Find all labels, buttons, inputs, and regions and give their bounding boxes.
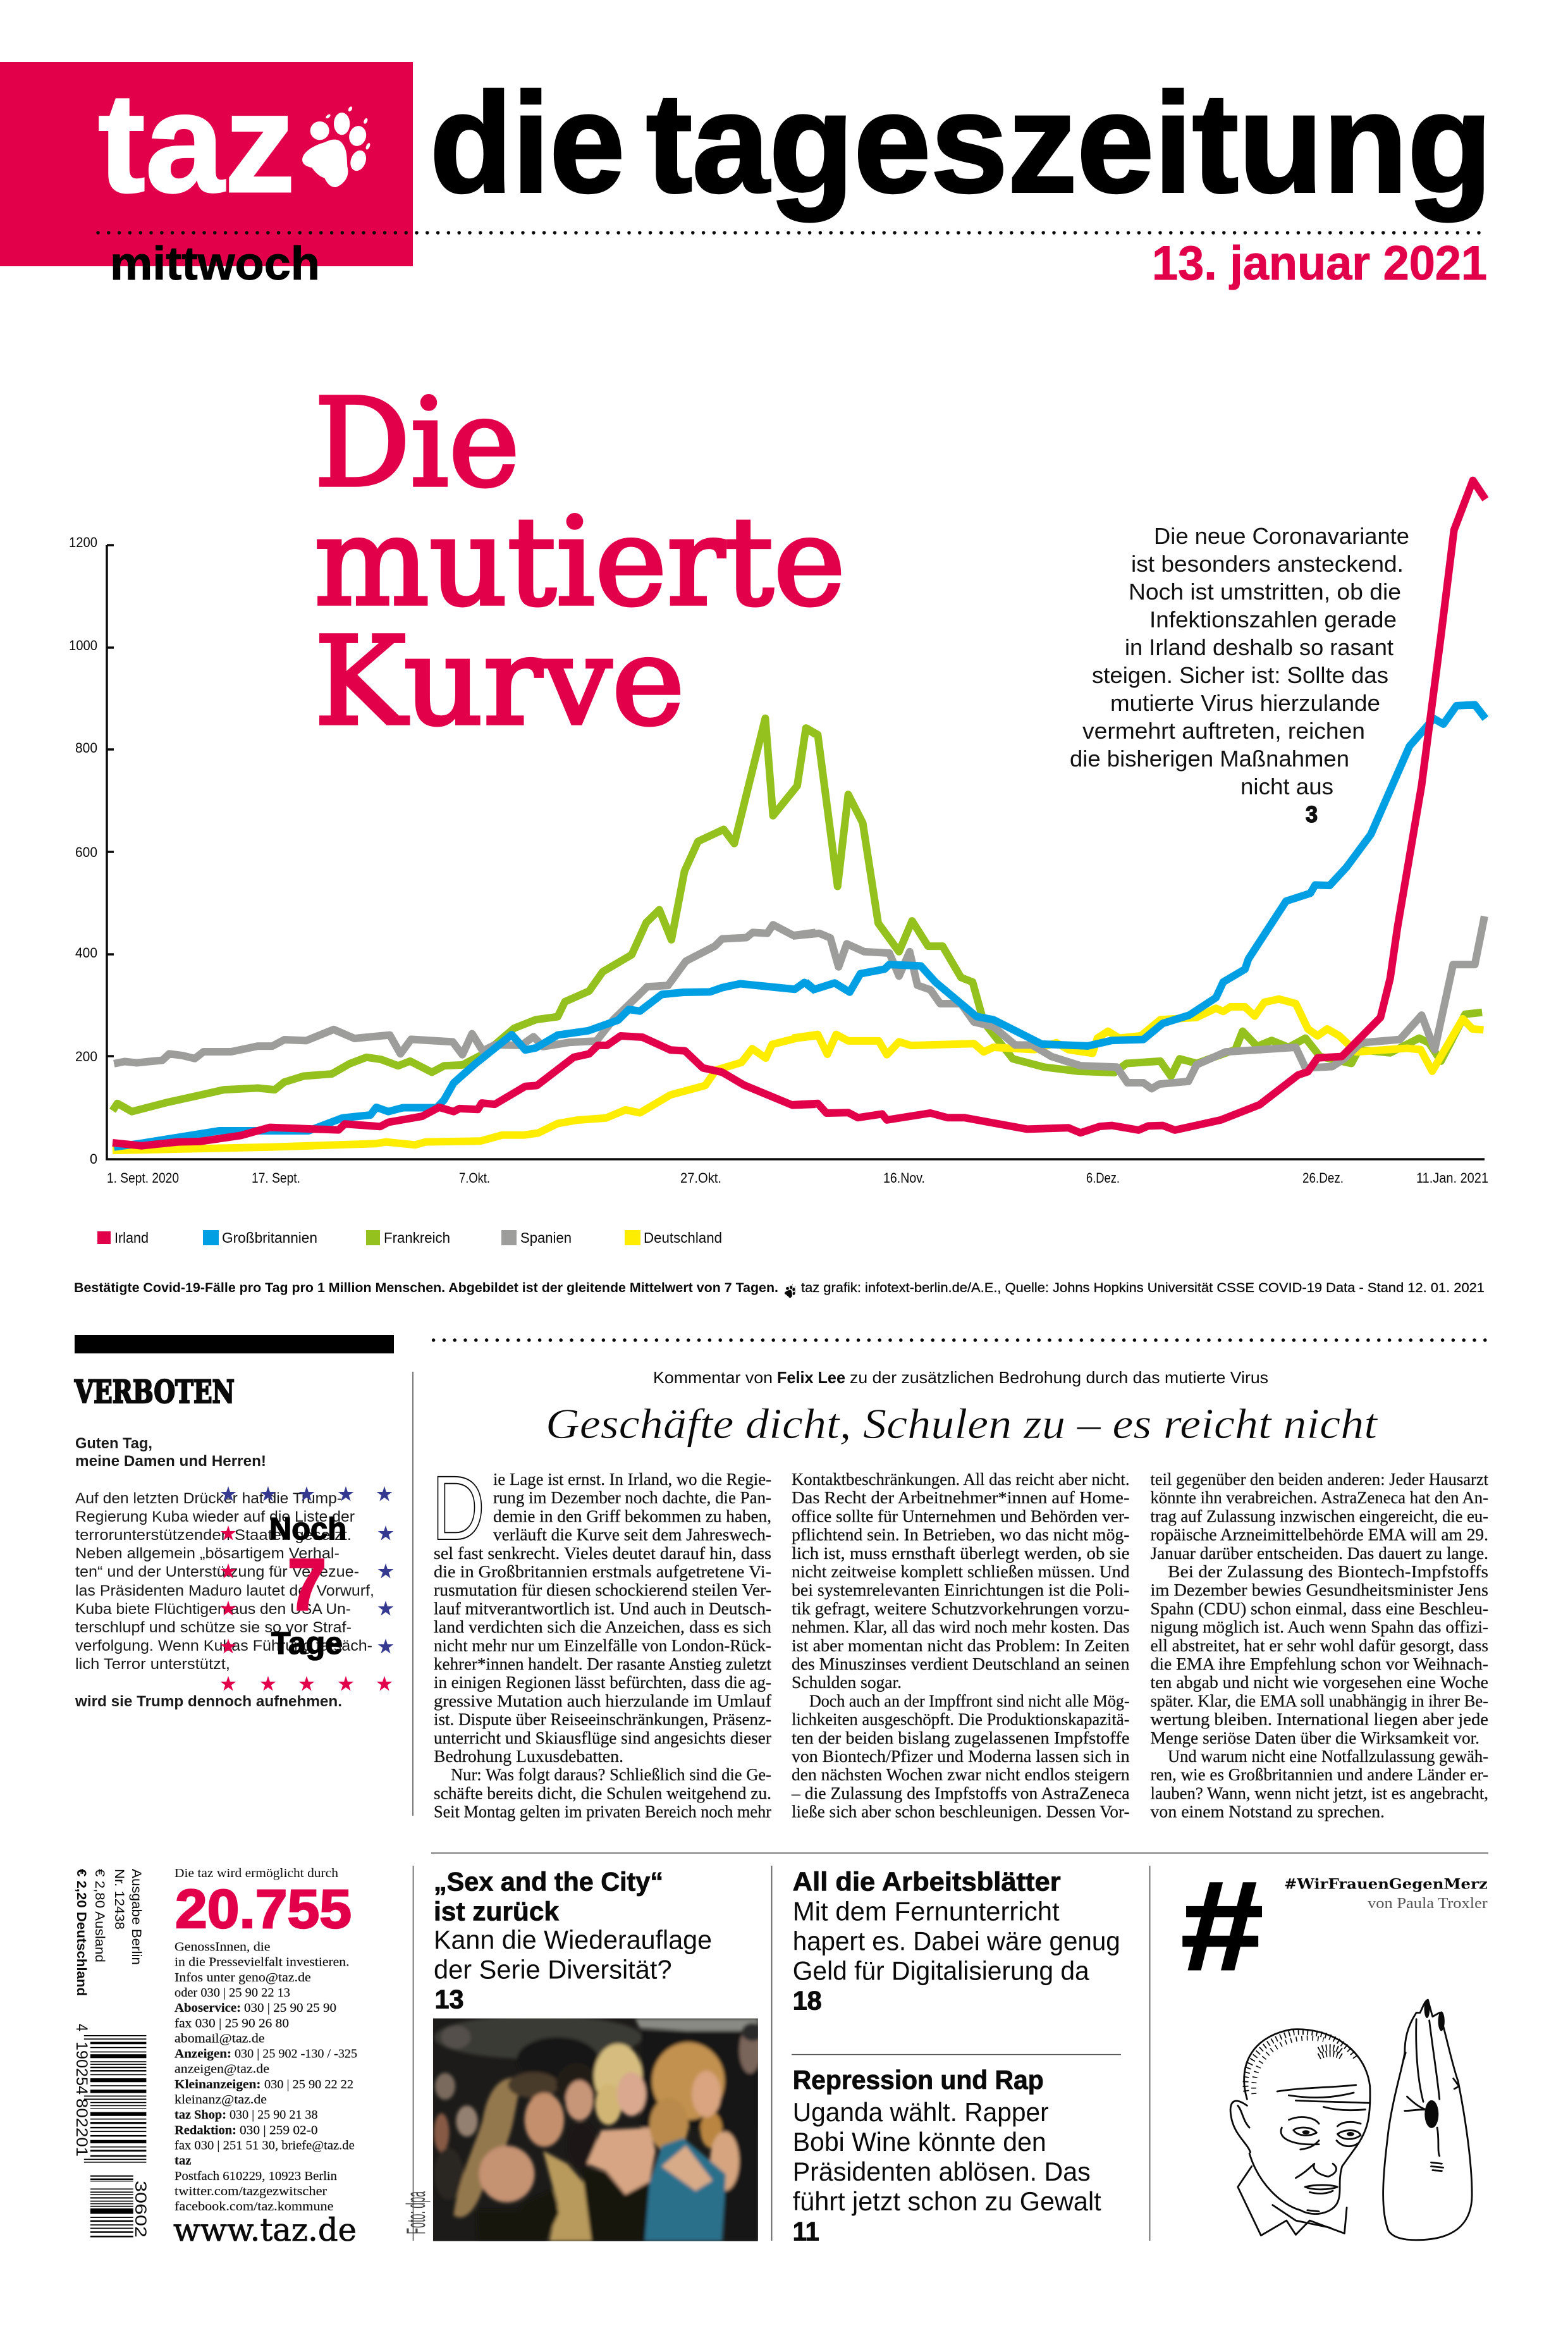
barcode: 30602 xyxy=(132,2181,149,2238)
article column 3: im Dezember bewies Gesundheitsminister Jens xyxy=(1151,1580,1488,1599)
x axis labels: 1. Sept. 2020 xyxy=(107,1170,179,1186)
callout text: Noch ist umstritten, ob die xyxy=(1129,579,1401,605)
article column 1: lauf mitverantwortlich ist. Und auch in Deutsch- xyxy=(434,1598,771,1618)
barcode: 4 xyxy=(73,2024,90,2031)
article column 3: ropäische Arzneimittelbehörde EMA will am 29. xyxy=(1151,1525,1488,1544)
logo block xyxy=(0,62,413,266)
headline: Kurve xyxy=(314,612,685,753)
article column 1: verläuft die Kurve seit dem Jahreswech- xyxy=(493,1525,771,1544)
contact lines: oder 030 | 25 90 22 13 xyxy=(175,1986,290,2000)
text block: terrorunterstützenden Staaten gesetzt. xyxy=(75,1527,352,1544)
text block: Neben allgemein „bösartigem Verhal- xyxy=(75,1545,340,1562)
article column 1: schäfte bereits dicht, die Schulen weitgehend zu. xyxy=(434,1783,771,1802)
edition info, rotated: Ausgabe Berlin xyxy=(129,1869,144,1965)
edition info, rotated xyxy=(74,1869,144,1996)
article column 1: sel fast senkrecht. Vieles deutet darauf hin, dass xyxy=(434,1543,771,1563)
teaser: Repression und Rap: führt jetzt schon zu Gewalt xyxy=(793,2186,1101,2216)
article column 3: Und warum nicht eine Notfallzulassung gewäh- xyxy=(1168,1746,1488,1766)
contact lines: abomail@taz.de xyxy=(175,2031,265,2045)
contact lines: 030 | 25 90 21 38 xyxy=(230,2108,317,2122)
contact lines: 030 | 25 90 25 90 xyxy=(244,2001,336,2015)
legend: Großbritannien xyxy=(222,1229,317,1246)
cartoon title: #WirFrauenGegenMerz xyxy=(1284,1876,1488,1892)
intro line: Die taz wird ermöglicht durch xyxy=(175,1867,338,1880)
y axis: 600 xyxy=(75,844,97,860)
article column 2: lich ist, muss ernsthaft überlegt werden, ob sie xyxy=(792,1543,1129,1563)
article column 2: Doch auch an der Impffront sind nicht alle Mög- xyxy=(809,1690,1129,1710)
callout text: in Irland deshalb so rasant xyxy=(1125,634,1393,660)
website: www.taz.de xyxy=(173,2212,357,2248)
contact lines: 030 | 25 902 -130 / -325 xyxy=(235,2047,357,2061)
countdown: noch 7 tage: Tage xyxy=(271,1627,343,1661)
newspaper title: die xyxy=(430,64,625,222)
article column 1: nicht mehr nur um Einzelfälle von London-Rück- xyxy=(434,1635,771,1655)
greeting: Guten Tag, xyxy=(75,1435,152,1452)
article column 1 xyxy=(434,1469,772,1821)
byline: Kommentar von xyxy=(653,1368,773,1387)
article column 2: des Minuszinses verdient Deutschland an seinen xyxy=(792,1654,1130,1673)
barcode xyxy=(73,2024,149,2238)
teaser: Repression und Rap xyxy=(793,2065,1101,2246)
byline: Felix Lee xyxy=(777,1368,845,1387)
edition info, rotated: € 2,20 Deutschland xyxy=(74,1869,89,1996)
article column 1: ie Lage ist ernst. In Irland, wo die Regie- xyxy=(493,1469,771,1489)
x axis labels: 7.Okt. xyxy=(459,1170,490,1186)
contact lines: GenossInnen, die xyxy=(175,1940,271,1954)
callout text: ist besonders ansteckend. xyxy=(1131,551,1404,577)
y axis: 1200 xyxy=(69,534,97,550)
edition info, rotated: € 2,80 Ausland xyxy=(92,1869,107,1962)
text block: Regierung Kuba wieder auf die Liste der xyxy=(75,1508,355,1525)
article column 2: Das Recht der Arbeitnehmer*innen auf Home- xyxy=(792,1487,1129,1507)
chart caption and source: Bestätigte Covid-19-Fälle pro Tag pro 1 Million Menschen. Abgebildet ist der gleitende Mittelwert von 7 Tagen. xyxy=(74,1281,778,1295)
article column 2: bei systemrelevanten Einrichtungen ist die Poli- xyxy=(792,1580,1129,1599)
article column 1: unterricht und Skiausflüge sind angesichts dieser xyxy=(434,1728,771,1747)
y axis: 400 xyxy=(75,945,97,961)
article column 3 xyxy=(1151,1469,1488,1821)
y axis: 800 xyxy=(75,740,97,756)
callout text: die bisherigen Maßnahmen xyxy=(1070,746,1349,772)
newspaper title: tageszeitung xyxy=(646,64,1492,222)
teaser: Arbeitsblätter: All die Arbeitsblätter xyxy=(793,1866,1061,1896)
article column 2: den nächsten Wochen zwar nicht endlos steigern xyxy=(792,1764,1130,1784)
line: Spanien xyxy=(114,916,1485,1088)
text block: lich Terror unterstützt, xyxy=(75,1656,230,1673)
greeting xyxy=(75,1435,266,1470)
teaser: Sex and the City: Kann die Wiederauflage xyxy=(434,1925,712,1955)
contact lines: fax 030 | 251 51 30, briefe@taz.de xyxy=(175,2139,355,2153)
line: Irland xyxy=(113,481,1485,1146)
weekday: mittwoch xyxy=(110,237,320,290)
icon: paw xyxy=(302,106,371,187)
article column 1: gressive Mutation auch hierzulande im Umlauf xyxy=(434,1690,772,1710)
barcode: 802201 xyxy=(73,2098,90,2157)
x axis labels: 26.Dez. xyxy=(1302,1170,1344,1186)
contact lines: 030 | 259 02-0 xyxy=(240,2123,317,2137)
text block: ten“ und der Unterstützung für Venezue- xyxy=(75,1563,359,1580)
callout text: Infektionszahlen gerade xyxy=(1149,607,1397,632)
article column 1: in einigen Regionen lässt befürchten, dass die ag- xyxy=(434,1672,771,1692)
legend: Spanien xyxy=(520,1229,572,1246)
x axis labels: 17. Sept. xyxy=(252,1170,300,1186)
callout text: Die neue Coronavariante xyxy=(1154,523,1409,549)
teaser: Sex and the City: 13 xyxy=(435,1985,464,2014)
byline xyxy=(653,1368,1268,1387)
teaser: Repression und Rap: Repression und Rap xyxy=(793,2065,1044,2095)
article column 2: office sollte für Unternehmen und Behörden ver- xyxy=(792,1506,1129,1525)
article column 2: – die Zulassung des Impfstoffs von AstraZeneca xyxy=(791,1783,1129,1802)
contact lines: 030 | 25 90 22 22 xyxy=(264,2078,353,2091)
article column 1: rusmutation für diesen schockierend steilen Ver- xyxy=(434,1580,771,1599)
article column 3: könnte ihn verabreichen. AstraZeneca hat den An- xyxy=(1151,1487,1488,1507)
edition info, rotated: Nr. 12438 xyxy=(112,1869,126,1930)
article column 1: Nur: Was folgt daraus? Schließlich sind die Ge- xyxy=(451,1764,771,1784)
contact lines: fax 030 | 25 90 26 80 xyxy=(175,2016,289,2030)
countdown: noch 7 tage: Noch xyxy=(269,1512,346,1546)
contact lines: Redaktion: xyxy=(175,2123,236,2137)
teaser: Sex and the City: Foto: dpa xyxy=(401,2191,431,2234)
article column 3: ten abgab und nicht wie vorgesehen eine Woche xyxy=(1151,1672,1488,1692)
contact lines: Anzeigen: xyxy=(175,2047,231,2061)
article column 1: die in Großbritannien erstmals aufgetretene Vi- xyxy=(434,1561,771,1581)
article column 2 xyxy=(791,1469,1130,1821)
article column 2: lichkeiten ausgeschöpft. Die Produktionskapazitä- xyxy=(792,1709,1129,1729)
text block xyxy=(75,1490,374,1710)
legend: Irland xyxy=(114,1229,149,1246)
x axis labels xyxy=(107,1170,1488,1186)
article column 1: ist. Dispute über Reiseeinschränkungen, Präsenz- xyxy=(434,1709,771,1729)
y axis: 200 xyxy=(75,1049,97,1064)
illustration: head and hand xyxy=(1230,2000,1472,2240)
contact lines: facebook.com/taz.kommune xyxy=(175,2200,334,2214)
callout text: steigen. Sicher ist: Sollte das xyxy=(1092,662,1388,688)
teaser: Repression und Rap: Bobi Wine könnte den xyxy=(793,2127,1046,2157)
callout text: mutierte Virus hierzulande xyxy=(1110,690,1380,716)
contact lines: in die Pressevielfalt investieren. xyxy=(175,1955,349,1969)
article column 2: nicht zeitweise komplett schließen müssen. Und xyxy=(792,1561,1130,1581)
teaser: Arbeitsblätter xyxy=(793,1866,1120,2015)
article column 3: die EMA ihre Empfehlung schon vor Weihnach- xyxy=(1151,1654,1488,1673)
x axis labels: 6.Dez. xyxy=(1086,1170,1120,1186)
article column 2: ließe sich aber schon beschleunigen. Dessen Vor- xyxy=(792,1802,1129,1821)
y axis xyxy=(69,534,1485,1167)
heading: Verboten: VERBOTEN xyxy=(74,1373,235,1410)
panel: Verboten column xyxy=(74,1335,394,1710)
article column 2: von Biontech/Pfizer und Moderna lassen sich in xyxy=(792,1746,1130,1766)
icon: hash sign: # xyxy=(1181,1856,1263,1997)
headline xyxy=(314,373,845,753)
panel: hashtag cartoon xyxy=(1181,1856,1488,2240)
contact lines: Postfach 610229, 10923 Berlin xyxy=(175,2169,337,2183)
byline: zu der zusätzlichen Bedrohung durch das mutierte Virus xyxy=(850,1368,1268,1387)
article heading: Geschäfte dicht, Schulen zu – es reicht nicht xyxy=(546,1400,1378,1448)
chart: covid cases xyxy=(69,481,1488,1298)
article column 1: rung im Dezember noch dachte, die Pan- xyxy=(493,1487,771,1507)
masthead xyxy=(0,62,1492,290)
article column 1: kehrer*innen handelt. Der rasante Anstieg zuletzt xyxy=(434,1654,771,1673)
article column 3: Januar darüber entscheiden. Das dauert zu lange. xyxy=(1151,1543,1488,1563)
callout text: nicht aus xyxy=(1240,773,1333,799)
text block: verfolgung. Wenn Kubas Führung tatsäch- xyxy=(75,1637,372,1654)
article column 2: ten der beiden bislang zugelassenen Impfstoffe xyxy=(792,1728,1129,1747)
legend: Frankreich xyxy=(384,1229,450,1246)
article column 3: lauben? Wann, wenn nicht jetzt, ist es angebracht, xyxy=(1151,1783,1488,1802)
y axis: 1000 xyxy=(69,637,97,653)
headline: Die xyxy=(314,373,520,514)
photo: four actresses xyxy=(433,2016,763,2241)
article column 1: demie in den Griff bekommen zu haben, xyxy=(493,1506,771,1525)
contact lines: Infos unter geno@taz.de xyxy=(175,1971,311,1985)
teaser: Sex and the City xyxy=(401,1866,763,2241)
article column 3: teil gegenüber den beiden anderen: Jeder Hausarzt xyxy=(1151,1469,1488,1489)
article column 3: Bei der Zulassung des Biontech-Impfstoffs xyxy=(1168,1561,1488,1581)
article column 3: trag auf Zulassung inzwischen eingereicht, die eu- xyxy=(1151,1506,1488,1525)
x axis labels: 27.Okt. xyxy=(680,1170,721,1186)
contact lines: taz Shop: xyxy=(175,2108,226,2122)
contact lines: twitter.com/tazgezwitscher xyxy=(175,2184,327,2198)
logo block: taz xyxy=(98,64,295,222)
article column 3: Spahn (CDU) schon einmal, dass eine Beschleu- xyxy=(1151,1598,1488,1618)
text block: Kuba biete Flüchtigen aus den USA Un- xyxy=(75,1601,351,1618)
contact lines: anzeigen@taz.de xyxy=(175,2062,269,2076)
barcode: 190254 xyxy=(73,2041,90,2095)
article column 2: Kontaktbeschränkungen. All das reicht aber nicht. xyxy=(792,1469,1129,1489)
y axis: 0 xyxy=(90,1151,97,1167)
contact lines: Aboservice: xyxy=(175,2001,241,2015)
text block: las Präsidenten Maduro lautet der Vorwurf, xyxy=(75,1582,374,1599)
text block: wird sie Trump dennoch aufnehmen. xyxy=(75,1693,342,1710)
article column 3: ren, wie es Großbritannien und andere Länder er- xyxy=(1151,1764,1488,1784)
teaser: Sex and the City: der Serie Diversität? xyxy=(434,1955,672,1985)
icon: stars frame xyxy=(221,1486,393,1691)
teaser: Arbeitsblätter: Geld für Digitalisierung da xyxy=(793,1956,1089,1986)
article column 2: Schulden sogar. xyxy=(792,1672,902,1692)
article column 2: nehmen. Klar, all das wird noch mehr kosten. Das xyxy=(792,1617,1129,1637)
line: Frankreich xyxy=(113,718,1482,1112)
article column 2: pflichtend sein. In Betrieben, wo das nicht mög- xyxy=(792,1525,1129,1544)
article column 3: Menge seriöse Daten über die Wirksamkeit vor. xyxy=(1151,1728,1479,1747)
callout text: vermehrt auftreten, reichen xyxy=(1082,718,1365,744)
contact lines: taz xyxy=(175,2154,191,2168)
contact lines: Kleinanzeigen: xyxy=(175,2078,260,2091)
article column 3: ell abstreitet, hat er sehr wohl dafür gesorgt, dass xyxy=(1151,1635,1488,1655)
countdown: noch 7 tage xyxy=(269,1512,346,1661)
text block: Auf den letzten Drücker hat die Trump- xyxy=(75,1490,342,1507)
x axis labels: 11.Jan. 2021 xyxy=(1416,1170,1488,1186)
teaser: Arbeitsblätter: hapert es. Dabei wäre genug xyxy=(793,1926,1120,1956)
callout text xyxy=(1070,523,1409,827)
head xyxy=(1230,2029,1370,2236)
article column 1: land verdichten sich die Anzeichen, dass es sich xyxy=(434,1617,771,1637)
headline: mutierte xyxy=(314,492,845,633)
teaser: Repression und Rap: Präsidenten ablösen. Das xyxy=(793,2157,1091,2186)
line: Deutschland xyxy=(113,999,1483,1150)
article column 2: tik gefragt, weitere Schutzvorkehrungen vorzu- xyxy=(792,1598,1129,1618)
legend xyxy=(97,1229,722,1246)
article column 3: wertung bleiben. International liegen aber jede xyxy=(1151,1709,1488,1729)
x axis labels: 16.Nov. xyxy=(883,1170,925,1186)
text block: terschlupf und schütze sie so vor Straf- xyxy=(75,1619,352,1636)
teaser: Sex and the City: „Sex and the City“ xyxy=(434,1866,663,1896)
callout text: 3 xyxy=(1306,801,1318,827)
number: shareholders: 20.755 xyxy=(175,1879,352,1940)
commentary article xyxy=(432,1368,1488,1821)
line: Großbritannien xyxy=(114,705,1485,1147)
teaser: Repression und Rap: Uganda wählt. Rapper xyxy=(793,2097,1049,2127)
teaser: Arbeitsblätter: 18 xyxy=(793,1986,822,2015)
panel: contact info xyxy=(173,1867,357,2248)
article column 3: später. Klar, die EMA soll unabhängig in ihrer Be- xyxy=(1151,1690,1488,1710)
article column 3: von einem Notstand zu sprechen. xyxy=(1151,1802,1385,1821)
contact lines xyxy=(175,1940,357,2214)
article column 1: Seit Montag gelten im privaten Bereich noch mehr xyxy=(434,1802,771,1821)
icon: drop cap: D xyxy=(432,1457,485,1559)
contact lines: kleinanz@taz.de xyxy=(175,2093,267,2107)
date: 13. januar 2021 xyxy=(1152,237,1487,290)
countdown: noch 7 tage: 7 xyxy=(287,1543,327,1626)
teaser: Sex and the City: ist zurück xyxy=(434,1897,560,1926)
greeting: meine Damen und Herren! xyxy=(75,1453,266,1470)
teaser: Arbeitsblätter: Mit dem Fernunterricht xyxy=(793,1897,1060,1926)
hand xyxy=(1383,2000,1472,2240)
article column 3: nigung möglich ist. Auch wenn Spahn das offizi- xyxy=(1151,1617,1488,1637)
article column 2: ist aber momentan nicht das Problem: In Zeiten xyxy=(792,1635,1130,1655)
chart caption and source xyxy=(74,1281,1485,1298)
cartoon author: von Paula Troxler xyxy=(1368,1895,1488,1912)
teaser: Repression und Rap: 11 xyxy=(793,2216,819,2246)
article column 1: Bedrohung Luxusdebatten. xyxy=(434,1746,623,1766)
legend: Deutschland xyxy=(644,1229,722,1246)
chart caption and source: taz grafik: infotext-berlin.de/A.E., Quelle: Johns Hopkins Universität CSSE COVID-19 Data - Stand 12. 01. 2021 xyxy=(801,1281,1485,1295)
